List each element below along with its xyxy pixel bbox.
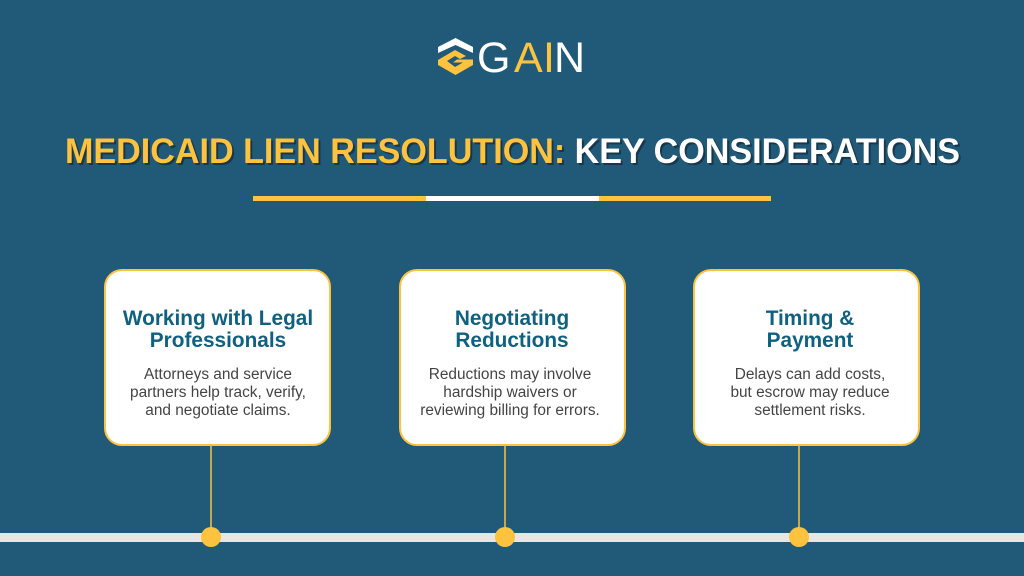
connector and marker <box>201 444 221 547</box>
body text: Attorneys and service <box>144 366 292 383</box>
connector and marker <box>495 444 515 547</box>
heading: Timing & <box>766 307 854 330</box>
logo wordmark: N <box>554 34 585 82</box>
title: MEDICAID LIEN RESOLUTION: KEY CONSIDERATIONS <box>65 132 960 171</box>
heading: Negotiating <box>455 307 569 330</box>
heading: Reductions <box>455 329 569 352</box>
panel: working with legal professionals <box>105 270 330 547</box>
panel: timing and payment <box>694 270 919 547</box>
logo wordmark: G <box>477 34 510 82</box>
logo wordmark: I <box>543 34 555 82</box>
body text: reviewing billing for errors. <box>420 402 600 419</box>
logo wordmark: A <box>514 34 543 82</box>
heading: Payment <box>767 329 853 352</box>
body text: partners help track, verify, <box>130 384 306 401</box>
logo: GAIN <box>438 34 585 82</box>
icon: logo mark <box>438 38 473 75</box>
card <box>400 270 625 445</box>
title divider <box>253 196 771 201</box>
body text: but escrow may reduce <box>730 384 890 401</box>
timeline bar <box>0 533 1024 542</box>
card <box>105 270 330 445</box>
body text: and negotiate claims. <box>145 402 291 419</box>
body text: Reductions may involve <box>429 366 591 383</box>
connector and marker <box>789 444 809 547</box>
body text: hardship waivers or <box>443 384 577 401</box>
heading: Professionals <box>150 329 286 352</box>
body text: settlement risks. <box>754 402 866 419</box>
title: MEDICAID LIEN RESOLUTION: KEY CONSIDERATIONS <box>67 134 962 173</box>
card <box>694 270 919 445</box>
heading: Working with Legal <box>123 307 313 330</box>
panel: negotiating reductions <box>400 270 625 547</box>
body text: Delays can add costs, <box>735 366 885 383</box>
